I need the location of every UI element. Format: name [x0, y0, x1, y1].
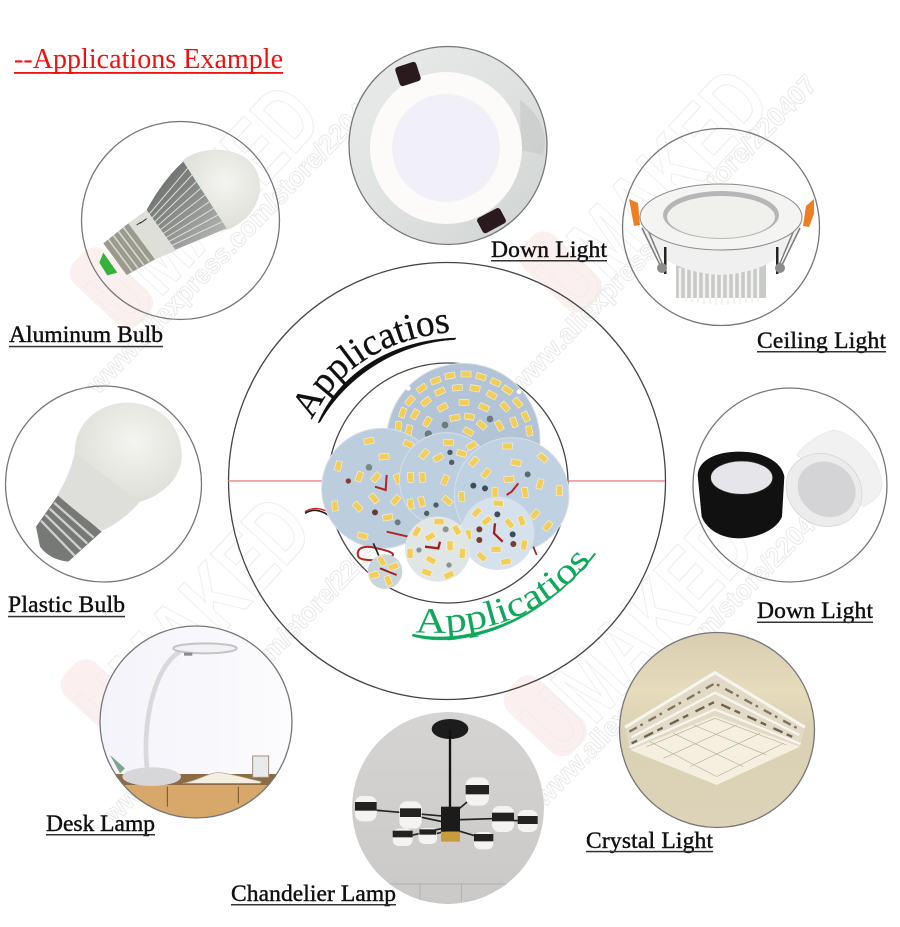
- board: middle: [399, 433, 494, 527]
- watermark: store logos and URLs: www.aliexpress.com/store/220407: [97, 513, 404, 830]
- label: Crystal Light: Crystal Light: [586, 828, 713, 854]
- curved heading: green: Applicatios: [416, 552, 588, 640]
- panel: LED circuit boards: [305, 363, 569, 589]
- icon: square crystal ceiling light: [620, 632, 814, 828]
- watermark: store logos and URLs: UMAKED: [502, 494, 774, 775]
- curved heading: black: Applicatios: [296, 314, 449, 420]
- label: Down Light right: Down Light: [757, 598, 873, 624]
- board: small right: [461, 497, 534, 570]
- icon: black and white surface lights: [698, 430, 882, 541]
- watermark: store logos and URLs: UMAKED: [59, 478, 331, 759]
- label: Down Light top: Down Light: [491, 237, 607, 263]
- label: Ceiling Light: Ceiling Light: [757, 328, 886, 354]
- board: right: [454, 438, 569, 555]
- label: Aluminum Bulb: Aluminum Bulb: [9, 322, 163, 348]
- icon: plastic bulb: [36, 403, 182, 562]
- label: Plastic Bulb: Plastic Bulb: [8, 592, 125, 618]
- watermark: store logos and URLs: www.aliexpress.com/store/220407: [502, 69, 823, 400]
- board: tiny with wires: [358, 543, 402, 589]
- panel: plastic bulb: [6, 386, 202, 582]
- icon: aluminum bulb: [99, 150, 260, 275]
- watermark: store logos and URLs: [54, 46, 841, 830]
- panel: chandelier: [352, 712, 544, 904]
- panel: desk lamp: [97, 626, 297, 818]
- label: Chandelier Lamp: Chandelier Lamp: [231, 881, 396, 907]
- panel: recessed down light: [349, 46, 547, 245]
- central rings and axis: [228, 262, 666, 700]
- title: --Applications Example: [14, 44, 283, 75]
- panel: aluminum bulb: [82, 122, 280, 320]
- panel: surface down light: [693, 388, 887, 582]
- icon: round panel light: [349, 46, 547, 245]
- board: left: [305, 428, 442, 548]
- panel: ceiling light: [622, 128, 820, 326]
- icon: desk lamp on wooden table: [101, 627, 276, 818]
- watermark: store logos and URLs: www.aliexpress.com/store/220407: [527, 489, 841, 813]
- board: small left: [405, 516, 470, 582]
- icon: ceiling downlight: [629, 184, 814, 305]
- watermark: store logos and URLs: www.aliexpress.com/store/220407: [80, 76, 394, 400]
- board: large top: [387, 363, 540, 517]
- icon: chandelier lamp: [352, 712, 544, 904]
- panel: crystal light: [620, 632, 814, 828]
- label: Desk Lamp: Desk Lamp: [46, 811, 155, 837]
